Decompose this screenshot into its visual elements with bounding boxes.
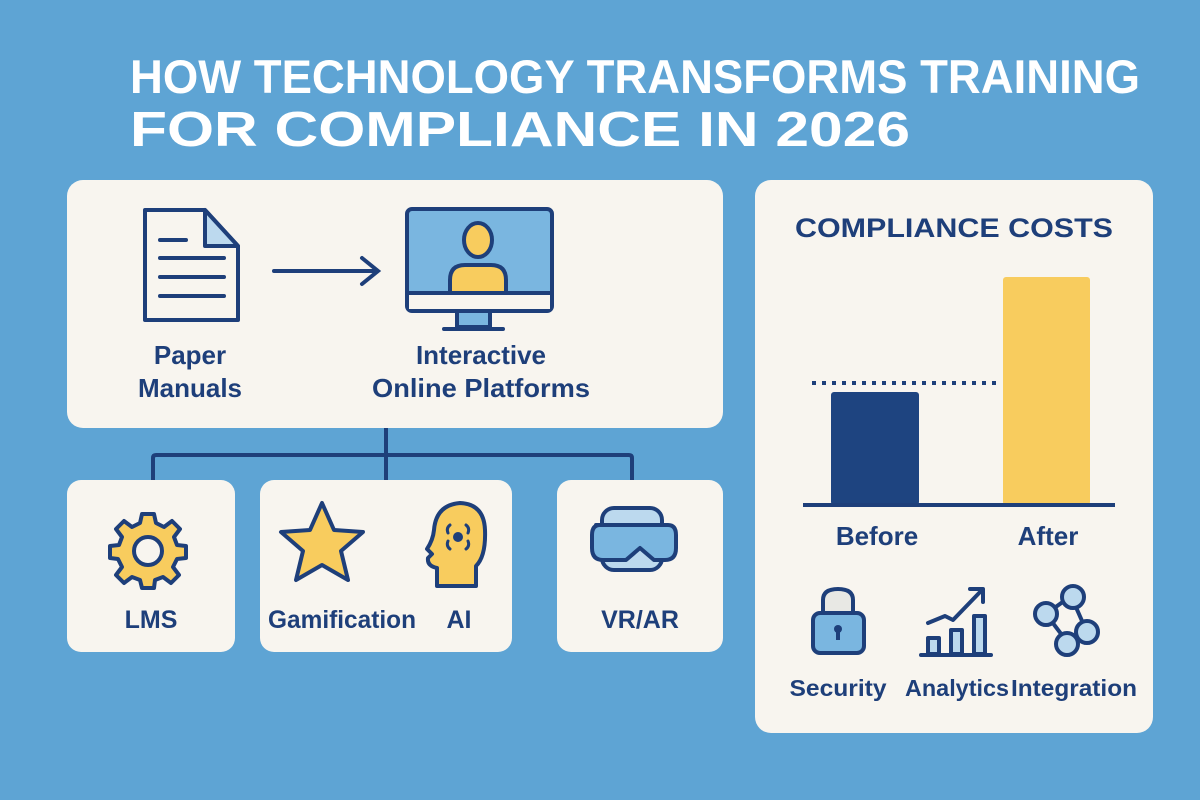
- panel: LMS: LMS: [125, 606, 177, 634]
- panel: LMS: [67, 480, 235, 652]
- text: interactive online platforms: Online Platforms: [372, 373, 590, 403]
- text: interactive online platforms: Interactive: [416, 340, 546, 370]
- icon: analytics: [921, 589, 991, 655]
- icon: integration nodes: [1035, 586, 1098, 655]
- connector lines: [153, 428, 632, 482]
- panel: compliance costs: Analytics: [905, 675, 1009, 701]
- title: FOR COMPLIANCE IN 2026: [130, 103, 910, 157]
- title: [130, 50, 1140, 157]
- icon: lock: [813, 589, 864, 653]
- title: HOW TECHNOLOGY TRANSFORMS TRAINING: [130, 50, 1140, 103]
- panel: compliance costs: Security: [790, 675, 887, 701]
- bar chart: [803, 277, 1115, 551]
- text: paper manuals: [138, 340, 242, 403]
- panel: VR/AR: VR/AR: [601, 606, 679, 634]
- icon: paper document: [145, 210, 238, 320]
- panel: VR/AR: [557, 480, 723, 652]
- icon: VR headset: [592, 508, 676, 570]
- panel: transformation: [67, 180, 723, 428]
- panel: compliance costs: [755, 180, 1153, 733]
- text: paper manuals: Paper: [154, 340, 226, 370]
- panel: gamification and AI: AI: [446, 606, 472, 634]
- icon: star: [281, 503, 363, 580]
- arrow: [274, 258, 378, 284]
- panel: gamification and AI: [260, 480, 512, 652]
- heading: compliance costs: COMPLIANCE COSTS: [795, 213, 1113, 243]
- panel: gamification and AI: Gamification: [268, 606, 416, 634]
- text: paper manuals: Manuals: [138, 373, 242, 403]
- bar chart: After: [1018, 521, 1078, 551]
- bar chart: Before: [836, 521, 918, 551]
- panel: compliance costs: Integration: [1011, 675, 1137, 701]
- icon: AI head: [427, 503, 485, 586]
- icon: gear: [110, 514, 186, 588]
- text: interactive online platforms: [372, 340, 590, 403]
- icon: monitor with person: [407, 209, 552, 329]
